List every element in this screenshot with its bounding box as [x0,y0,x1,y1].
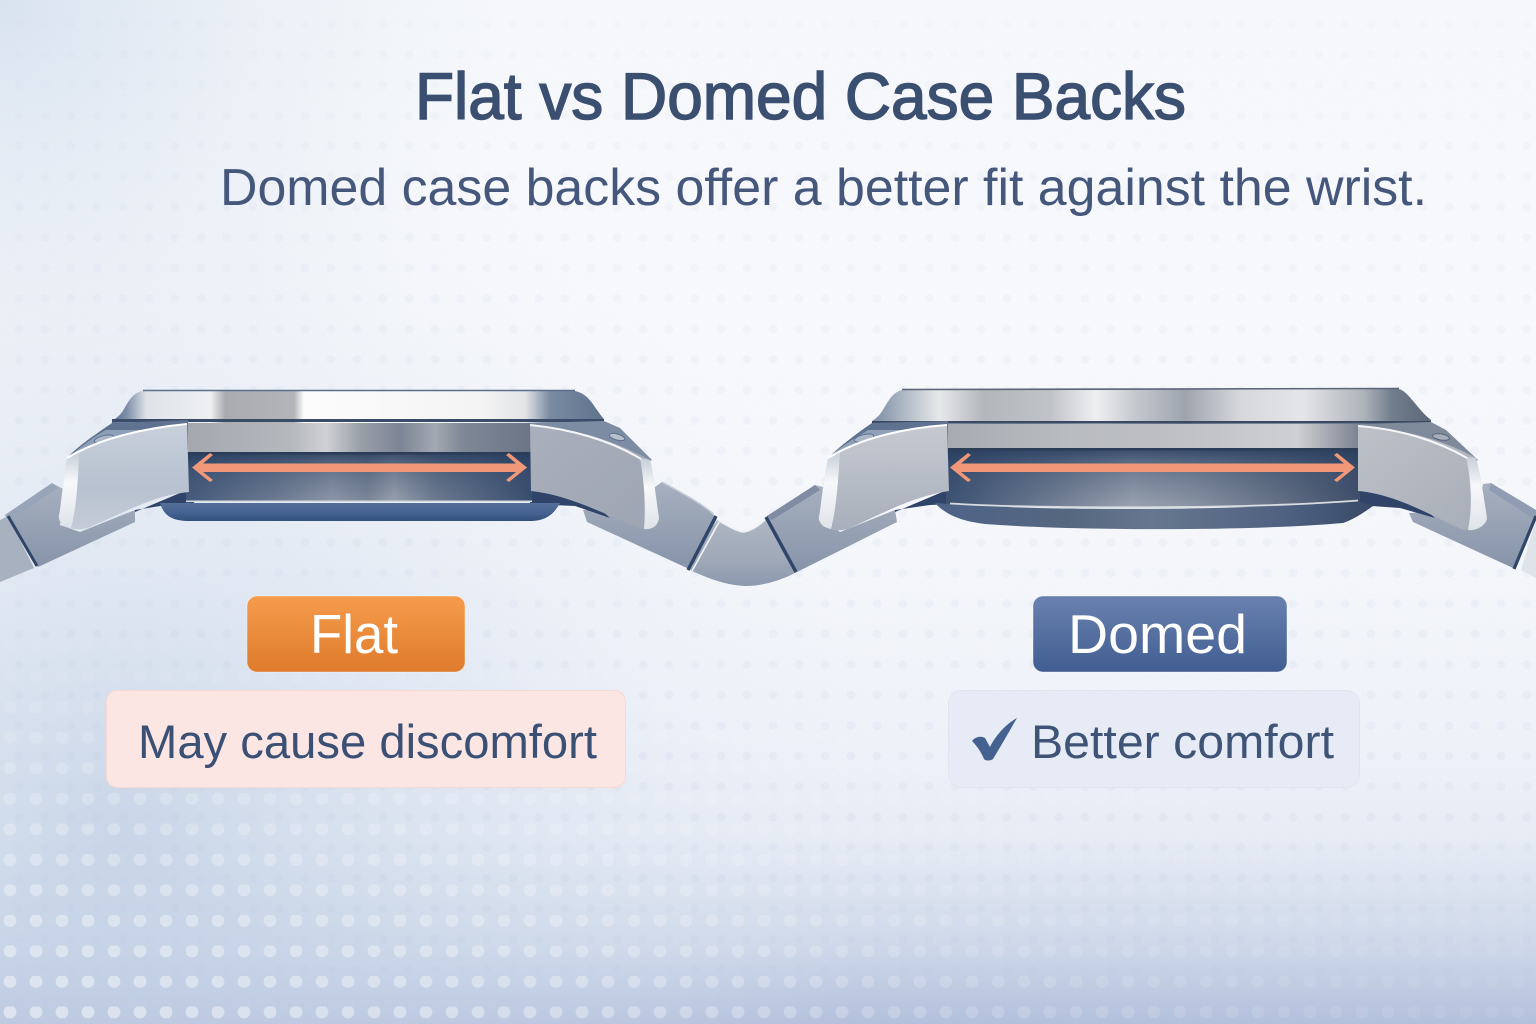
flat case back [160,503,560,521]
callout: May cause discomfort: May cause discomfort [138,715,597,768]
domed case back [935,501,1373,529]
flat watch [59,390,659,529]
domed watch [819,388,1487,530]
domed lug shadows [895,490,1435,518]
flat bezel [112,390,604,423]
domed case mid band [946,423,1360,448]
left bracelet end [0,483,135,582]
flat lug shadows [135,490,610,518]
domed bezel [872,388,1431,424]
icon: arrow width flat [192,453,527,482]
callout: May cause discomfort [106,690,626,788]
center bracelet between watches [583,482,897,586]
domed right lug [1358,422,1487,530]
subtitle: Domed case backs offer a better fit against the wrist. [220,159,1427,217]
right bracelet end [1409,483,1536,578]
badge: Domed: Domed [1068,603,1247,665]
flat case lower section [186,452,532,502]
badge: Flat [247,596,465,672]
icon: arrow width domed [950,453,1355,482]
badge: Domed [1033,596,1287,672]
domed left lug [819,421,949,530]
flat left lug [59,420,189,529]
icon: check mark [972,718,1017,760]
flat right lug [530,421,659,529]
flat case mid band [186,421,532,452]
callout: Better comfort [948,690,1360,788]
badge: Flat: Flat [310,603,398,665]
title: Flat vs Domed Case Backs [415,59,1186,133]
callout: Better comfort: Better comfort [1031,715,1334,768]
domed case lower section [946,448,1360,507]
